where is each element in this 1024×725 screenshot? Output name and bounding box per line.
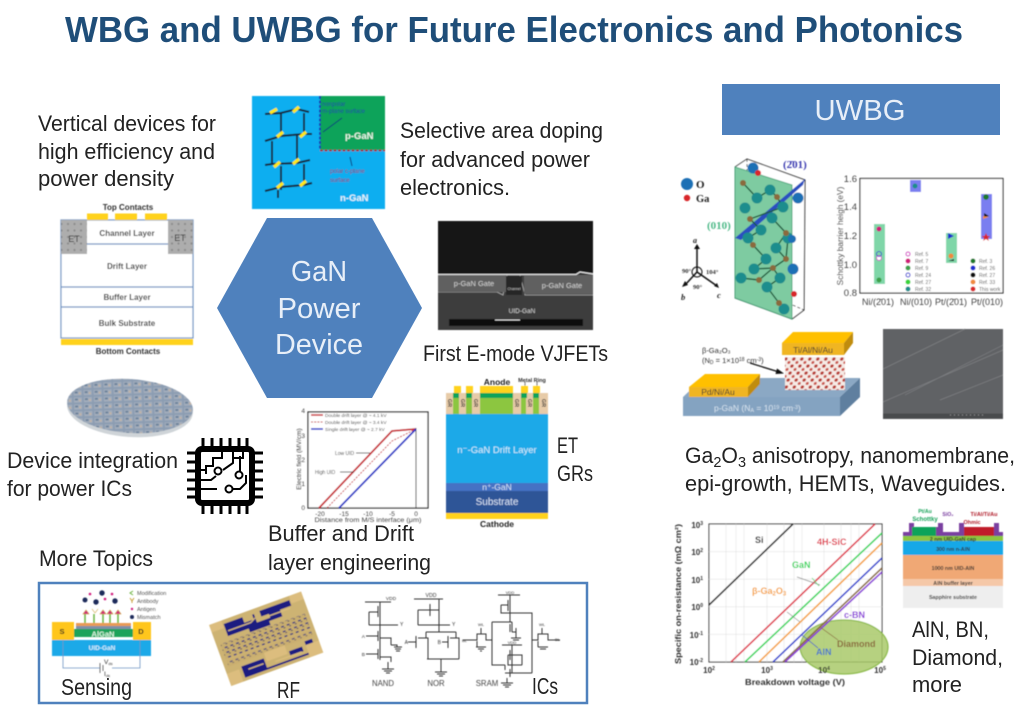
diagram: AlN device stack [903, 509, 1003, 608]
chart: specific on-resistance vs breakdown voltage [673, 521, 888, 687]
diagram: p-GaN selective area doping: n-GaN [340, 193, 369, 204]
chart: electric field vs distance: -15 [339, 511, 349, 518]
circuits: NAND, NOR and SRAM schematics: VDD [508, 640, 516, 645]
chart: specific on-resistance vs breakdown voltage: Si [755, 535, 764, 545]
text: buffer and drift layer engineering [268, 521, 431, 575]
heading box: UWBG [722, 84, 1000, 135]
diagram: guard-ring device cross-section: GR [459, 399, 465, 407]
diagram: Ga2O3 on p-GaN heterojunction: cm [779, 403, 793, 413]
circuits: NAND, NOR and SRAM schematics: SRAM [476, 679, 498, 688]
chart: specific on-resistance vs breakdown voltage: 3 [700, 521, 703, 527]
chart: Schottky barrier height: Ref. 27 [979, 273, 995, 279]
chart: specific on-resistance vs breakdown voltage: 2 [712, 666, 715, 672]
diagram: beta-Ga2O3 crystal: c [717, 290, 721, 300]
text: vertical devices: power density [38, 166, 174, 191]
circuits: NAND, NOR and SRAM schematics: VDD [386, 596, 397, 602]
circuits: NAND, NOR and SRAM schematics: BL [462, 638, 468, 643]
chart: specific on-resistance vs breakdown voltage: β-Ga [752, 586, 772, 596]
diagram: guard-ring device cross-section: Substrate [476, 497, 519, 508]
diagram: beta-Ga2O3 crystal [681, 159, 807, 319]
chart: Schottky barrier height: Ref. 33 [979, 280, 995, 286]
diagram: p-GaN selective area doping: p-GaN [345, 131, 374, 142]
diagram: Ga2O3 on p-GaN heterojunction: β-Ga₂O₃ [702, 346, 731, 355]
diagram: beta-Ga2O3 crystal: b [681, 292, 685, 302]
chart: specific on-resistance vs breakdown voltage: 10 [690, 631, 699, 640]
image: SEM of vertical JFET: UID-GaN [509, 308, 536, 315]
hexagon: GaN Power Device [217, 218, 422, 398]
chart: electric field vs distance: Single drift layer @ ~ 2.7 kV [325, 427, 385, 433]
chart: specific on-resistance vs breakdown voltage: 3 [770, 666, 773, 672]
circuits: NAND, NOR and SRAM schematics: VDD [506, 590, 514, 595]
chart: specific on-resistance vs breakdown voltage: Diamond [837, 639, 876, 649]
text: AlN, BN, Diamond, more: Diamond, [912, 645, 1003, 670]
text: vertical devices: Vertical devices for [38, 111, 216, 136]
text: Ga2O3 anisotropy: epi-growth, HEMTs, Waveguides. [685, 471, 1006, 496]
circuits: NAND, NOR and SRAM schematics: BL [555, 637, 561, 642]
chart: Schottky barrier height: 1.2 [844, 231, 857, 242]
chart: Schottky barrier height: Schottky barrier heigh (eV) [835, 186, 845, 285]
text: vertical devices: high efficiency and [38, 139, 215, 164]
chart: Schottky barrier height: 1.6 [844, 174, 857, 185]
diagram: vertical device cross-section: ET [174, 233, 186, 243]
chart: electric field vs distance: Electric field (MV/cm) [296, 428, 303, 490]
diagram: HEMT biosensor: Mismatch [137, 615, 161, 621]
chart: specific on-resistance vs breakdown voltage: 10 [691, 521, 700, 530]
diagram: HEMT biosensor: V [104, 659, 108, 666]
diagram: vertical device cross-section: Buffer Layer [103, 293, 151, 302]
chart: specific on-resistance vs breakdown voltage: 3 [783, 592, 787, 598]
text: ET GRs: GRs [557, 461, 593, 486]
chart: electric field vs distance: -10 [363, 511, 373, 518]
circuits: NAND, NOR and SRAM schematics: B [438, 640, 442, 646]
text: buffer and drift layer engineering: Buffer and Drift [268, 521, 414, 546]
text: selective area doping: Selective area doping [400, 118, 603, 143]
chart: Schottky barrier height: Ref. 24 [915, 273, 931, 279]
diagram: AlN device stack: AlN buffer layer [933, 581, 973, 587]
text: AlN, BN, Diamond, more: more [912, 672, 962, 697]
image: SEM of vertical JFET: p-GaN Gate [542, 281, 582, 290]
diagram: guard-ring device cross-section: GR [446, 399, 452, 407]
chart: electric field vs distance: 0 [301, 505, 305, 512]
chart: specific on-resistance vs breakdown voltage: 10 [761, 666, 770, 675]
chart: electric field vs distance: 3 [301, 433, 305, 440]
diagram: vertical device cross-section: Top Contacts [103, 203, 154, 212]
chart: specific on-resistance vs breakdown voltage: 10 [703, 666, 712, 675]
diagram: AlN device stack: Ti/Al/Ti/Au [970, 512, 998, 518]
chart: electric field vs distance: High UID [315, 470, 336, 476]
diagram: beta-Ga2O3 crystal: O [696, 179, 705, 191]
diagram: AlN device stack: SiO₂ [942, 512, 954, 518]
diagram: vertical device cross-section: Channel Layer [99, 229, 155, 238]
heading box: UWBG: UWBG [814, 95, 906, 127]
diagram: Ga2O3 on p-GaN heterojunction: (N [702, 356, 710, 365]
diagram: beta-Ga2O3 crystal: Ga [696, 194, 710, 205]
chart: electric field vs distance: 2 [301, 457, 305, 464]
chart: specific on-resistance vs breakdown voltage: 4H-SiC [817, 537, 847, 547]
diagram: Ga2O3 on p-GaN heterojunction: ) [798, 403, 801, 413]
circuits: NAND, NOR and SRAM schematics: VDD [426, 593, 437, 599]
chart: electric field vs distance [296, 408, 428, 524]
diagram: Ga2O3 on p-GaN heterojunction: -3 [757, 357, 761, 363]
text: Ga2O3 anisotropy: anisotropy, nanomembrane, [746, 443, 1015, 468]
chart: specific on-resistance vs breakdown voltage: GaN [792, 560, 811, 570]
chart: Schottky barrier height [835, 174, 1003, 308]
text: Ga2O3 anisotropy: 2 [713, 454, 721, 471]
diagram: beta-Ga2O3 crystal: (2̄01) [783, 159, 807, 171]
chart: specific on-resistance vs breakdown voltage: 10 [818, 666, 827, 675]
diagram: p-GaN selective area doping: surface [330, 178, 350, 184]
image: SEM of vertical JFET: Channel [507, 287, 521, 291]
text: selective area doping: electronics. [400, 175, 510, 200]
chart: electric field vs distance: Low UID [335, 451, 355, 457]
diagram: guard-ring device cross-section: n⁺-GaN [482, 482, 512, 492]
heading: More Topics: More Topics [39, 546, 153, 571]
diagram: vertical device cross-section: Drift Layer [107, 262, 147, 271]
image: SEM of vertical JFET: p-GaN Gate [454, 279, 494, 288]
chart: specific on-resistance vs breakdown voltage: 0 [700, 603, 703, 609]
label: RF: RF [277, 677, 300, 703]
chart: electric field vs distance: -20 [315, 511, 325, 518]
text: vertical devices [38, 111, 216, 191]
diagram: HEMT biosensor: ds [108, 661, 113, 666]
hexagon: GaN Power Device: GaN [291, 256, 347, 288]
diagram: guard-ring device cross-section: GR [472, 399, 478, 407]
circuits: NAND, NOR and SRAM schematics: A [405, 640, 409, 646]
diagram: HEMT biosensor: Antigen [137, 607, 156, 613]
circuits: NAND, NOR and SRAM schematics: Y [400, 622, 404, 628]
circuits: NAND, NOR and SRAM schematics: Y [452, 622, 456, 628]
diagram: Ga2O3 on p-GaN heterojunction: -3 [793, 405, 798, 411]
diagram: Ga2O3 on p-GaN heterojunction: A [750, 408, 754, 414]
chart: specific on-resistance vs breakdown voltage: 2 [772, 592, 776, 598]
chart: Schottky barrier height: Ref. 32 [915, 287, 931, 293]
chart: specific on-resistance vs breakdown voltage: Specific on-resistance (mΩ cm²) [673, 524, 683, 664]
title: WBG and UWBG for Future Electronics and Photonics [65, 9, 963, 50]
chart: Schottky barrier height: Ref. 9 [915, 266, 929, 272]
diagram: vertical device cross-section: ET [68, 234, 80, 244]
diagram: Ga2O3 on p-GaN heterojunction: ) [761, 356, 764, 365]
image: GaN wafer [65, 375, 195, 441]
diagram: beta-Ga2O3 crystal: a [693, 236, 697, 245]
circuits: NAND, NOR and SRAM schematics: B [362, 652, 365, 658]
diagram: vertical device cross-section [61, 203, 193, 356]
chart: specific on-resistance vs breakdown voltage: 5 [883, 666, 886, 672]
chart: Schottky barrier height: Ref. 3 [979, 259, 993, 265]
diagram: beta-Ga2O3 crystal: 90° [682, 268, 692, 275]
chart: electric field vs distance: Distance from M/S interface (μm) [314, 517, 422, 524]
text: Ga2O3 anisotropy: 3 [738, 454, 746, 471]
chart: electric field vs distance: 4 [301, 408, 305, 415]
diagram: AlN device stack: Sapphire substrate [929, 595, 977, 601]
circuits: NAND, NOR and SRAM schematics: WL [478, 622, 485, 627]
label: ICs: ICs [532, 673, 558, 699]
text: device integration: for power ICs [7, 476, 132, 501]
diagram: p-GaN selective area doping: polar c-plane [330, 169, 365, 175]
chart: specific on-resistance vs breakdown voltage: Breakdown voltage (V) [745, 677, 845, 687]
text: First E-mode VJFETs: First E-mode VJFETs [423, 341, 608, 366]
label: Sensing: Sensing [61, 674, 132, 700]
chart: specific on-resistance vs breakdown voltage: -2 [699, 658, 703, 664]
diagram: guard-ring device cross-section: GR [513, 399, 519, 407]
diagram: HEMT biosensor [52, 590, 166, 678]
diagram: guard-ring device cross-section: Anode [484, 377, 510, 387]
chart: specific on-resistance vs breakdown voltage: 10 [690, 658, 699, 667]
chart: specific on-resistance vs breakdown voltage: 1 [700, 576, 703, 582]
chart: electric field vs distance: Double drift layer @ ~ 3.4 kV [325, 420, 387, 426]
circuits: NAND, NOR and SRAM schematics: NOR [427, 679, 445, 688]
diagram: p-GaN selective area doping: m-plane surface [322, 109, 366, 115]
image: RF MMIC chip [209, 591, 323, 686]
hexagon: GaN Power Device: Device [275, 329, 363, 361]
chart: electric field vs distance: Double drift layer @ ~ 4.1 kV [325, 413, 387, 419]
text: buffer and drift layer engineering: layer engineering [268, 550, 431, 575]
chart: Schottky barrier height: Pt/(2̄01) [935, 297, 967, 308]
chart: electric field vs distance: -5 [389, 511, 395, 518]
text: device integration [7, 448, 178, 501]
diagram: HEMT biosensor: S [59, 627, 65, 636]
text: selective area doping: for advanced power [400, 147, 590, 172]
chart: Schottky barrier height: Ref. 26 [979, 266, 995, 272]
hexagon: GaN Power Device: Power [278, 293, 361, 325]
text: AlN, BN, Diamond, more [912, 617, 1003, 697]
diagram: guard-ring device cross-section: Metal Ring [518, 378, 546, 384]
circuits: NAND, NOR and SRAM schematics: NAND [372, 679, 394, 688]
diagram: AlN device stack: 2 nm UID-GaN cap [930, 537, 977, 543]
diagram: AlN device stack: Pt/Au [918, 509, 932, 515]
text: device integration: Device integration [7, 448, 178, 473]
text: AlN, BN, Diamond, more: AlN, BN, [912, 617, 989, 642]
diagram: Ga2O3 on p-GaN heterojunction: Ti/Al/Ni/Au [793, 345, 833, 355]
diagram: AlN device stack: Ohmic [963, 520, 981, 526]
diagram: HEMT biosensor: Antibody [137, 599, 159, 605]
diagram: HEMT biosensor: I [104, 671, 106, 678]
diagram: beta-Ga2O3 crystal: 90° [693, 284, 702, 291]
diagram: Ga2O3 on p-GaN heterojunction: = 1×10 [714, 356, 739, 365]
icon: IC chip [187, 438, 263, 514]
chart: Schottky barrier height: 1.0 [844, 260, 857, 271]
diagram: p-GaN selective area doping [252, 96, 385, 209]
chart: Schottky barrier height: Pt/(010) [971, 297, 1003, 308]
image: SEM of nanomembrane [883, 329, 1003, 419]
text: ET GRs: ET [557, 433, 578, 458]
circuits: NAND, NOR and SRAM schematics [362, 590, 561, 688]
diagram: guard-ring device cross-section [446, 377, 548, 529]
diagram: HEMT biosensor: D [138, 627, 144, 636]
diagram: HEMT biosensor: ds [106, 673, 110, 678]
text: Ga2O3 anisotropy: Ga [685, 443, 714, 468]
panel: more topics [39, 583, 587, 703]
diagram: Ga2O3 on p-GaN heterojunction: cm [745, 356, 757, 365]
chart: Schottky barrier height: Ni/(2̄01) [862, 297, 894, 308]
text: selective area doping [400, 118, 603, 200]
diagram: guard-ring device cross-section: n⁻-GaN Drift Layer [457, 445, 537, 456]
diagram: beta-Ga2O3 crystal: 104° [706, 269, 719, 276]
chart: Schottky barrier height: Ref. 27 [915, 280, 931, 286]
diagram: HEMT biosensor: UID-GaN [89, 645, 116, 652]
chart: specific on-resistance vs breakdown voltage: 2 [700, 548, 703, 554]
diagram: guard-ring device cross-section: GR [540, 399, 546, 407]
diagram: Ga2O3 on p-GaN heterojunction: 19 [773, 405, 779, 411]
diagram: vertical device cross-section: Bulk Substrate [99, 319, 156, 328]
diagram: guard-ring device cross-section: GR [526, 399, 532, 407]
diagram: AlN device stack: 300 nm n-AlN [936, 547, 970, 553]
chart: Schottky barrier height: Ni/(010) [900, 297, 932, 308]
diagram: p-GaN selective area doping: nonpolar [322, 102, 345, 108]
diagram: Ga2O3 on p-GaN heterojunction: = 10 [754, 403, 773, 413]
diagram: vertical device cross-section: Bottom Contacts [96, 347, 161, 356]
chart: Schottky barrier height: Ref. 7 [915, 259, 929, 265]
text: Ga2O3 anisotropy: O [721, 443, 738, 468]
image: SEM of vertical JFET [438, 221, 593, 330]
chart: specific on-resistance vs breakdown voltage: -1 [699, 631, 703, 637]
chart: electric field vs distance: 1 [301, 481, 305, 488]
diagram: guard-ring device cross-section: Cathode [480, 519, 514, 529]
diagram: Ga2O3 on p-GaN heterojunction: p-GaN (N [714, 403, 750, 413]
text: Ga2O3 anisotropy [685, 443, 1015, 496]
diagram: HEMT biosensor: AlGaN [92, 630, 114, 638]
chart: Schottky barrier height: 0.8 [844, 288, 857, 299]
diagram: AlN device stack: 1000 nm UID-AlN [932, 566, 975, 572]
diagram: Ga2O3 on p-GaN heterojunction: Pd/Ni/Au [701, 387, 735, 397]
text: ET GRs [557, 433, 593, 486]
chart: specific on-resistance vs breakdown voltage: 10 [691, 548, 700, 557]
chart: specific on-resistance vs breakdown voltage: 4 [827, 666, 830, 672]
chart: specific on-resistance vs breakdown voltage: 10 [691, 603, 700, 612]
diagram: Ga2O3 on p-GaN heterojunction [683, 332, 860, 416]
chart: specific on-resistance vs breakdown voltage: AlN [816, 647, 832, 657]
chart: Schottky barrier height: 1.4 [844, 202, 857, 213]
diagram: AlN device stack: Schottky [912, 517, 938, 523]
diagram: Ga2O3 on p-GaN heterojunction: D [710, 360, 714, 366]
chart: electric field vs distance: 0 [414, 511, 418, 518]
chart: Schottky barrier height: Ref. 5 [915, 252, 929, 258]
chart: specific on-resistance vs breakdown voltage: O [776, 586, 783, 596]
chart: specific on-resistance vs breakdown voltage: 10 [691, 576, 700, 585]
chart: specific on-resistance vs breakdown voltage: 10 [874, 666, 883, 675]
chart: specific on-resistance vs breakdown voltage: c-BN [844, 610, 865, 620]
diagram: Ga2O3 on p-GaN heterojunction: 18 [739, 357, 745, 363]
diagram: HEMT biosensor: Modification [137, 591, 166, 597]
chart: Schottky barrier height: This work [979, 287, 1001, 293]
diagram: beta-Ga2O3 crystal: (010) [707, 220, 731, 232]
circuits: NAND, NOR and SRAM schematics: WL [539, 622, 546, 627]
circuits: NAND, NOR and SRAM schematics: A [362, 634, 366, 640]
